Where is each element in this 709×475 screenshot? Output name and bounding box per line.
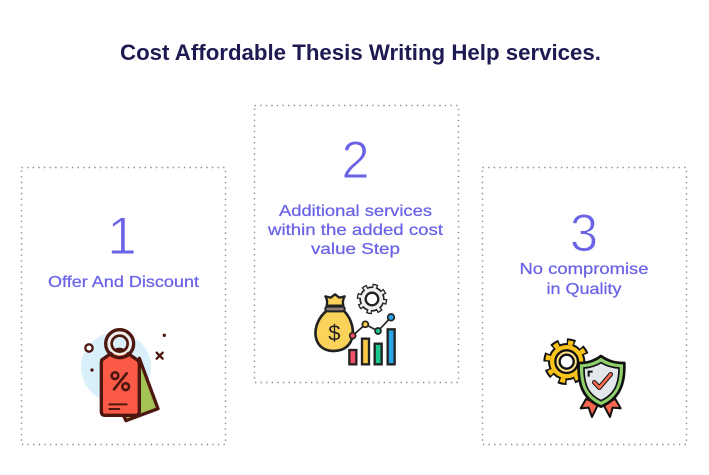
panel: additional services bbox=[254, 106, 458, 382]
text: no compromise in quality bbox=[520, 261, 649, 298]
icon: gear and shield bbox=[547, 342, 624, 417]
icon: money bag and chart bbox=[315, 286, 395, 364]
text: additional services bbox=[267, 203, 444, 258]
panel: offer and discount bbox=[22, 168, 226, 444]
title: Cost Affordable Thesis Writing Help services. bbox=[120, 40, 601, 65]
text: additional services: Additional services bbox=[279, 203, 432, 220]
number 1: 1 bbox=[107, 207, 137, 266]
text: no compromise in quality: No compromise bbox=[520, 261, 649, 278]
icon: price tags bbox=[81, 330, 166, 421]
text: additional services: within the added cost bbox=[267, 222, 444, 239]
panel: no compromise in quality bbox=[482, 168, 686, 444]
number 2: 2 bbox=[342, 131, 370, 190]
number 3: 3 bbox=[570, 204, 598, 263]
icon: money bag and chart: $ bbox=[328, 320, 340, 345]
text: offer and discount: Offer And Discount bbox=[48, 274, 200, 291]
text: no compromise in quality: in Quality bbox=[546, 281, 622, 298]
text: additional services: value Step bbox=[311, 241, 400, 258]
